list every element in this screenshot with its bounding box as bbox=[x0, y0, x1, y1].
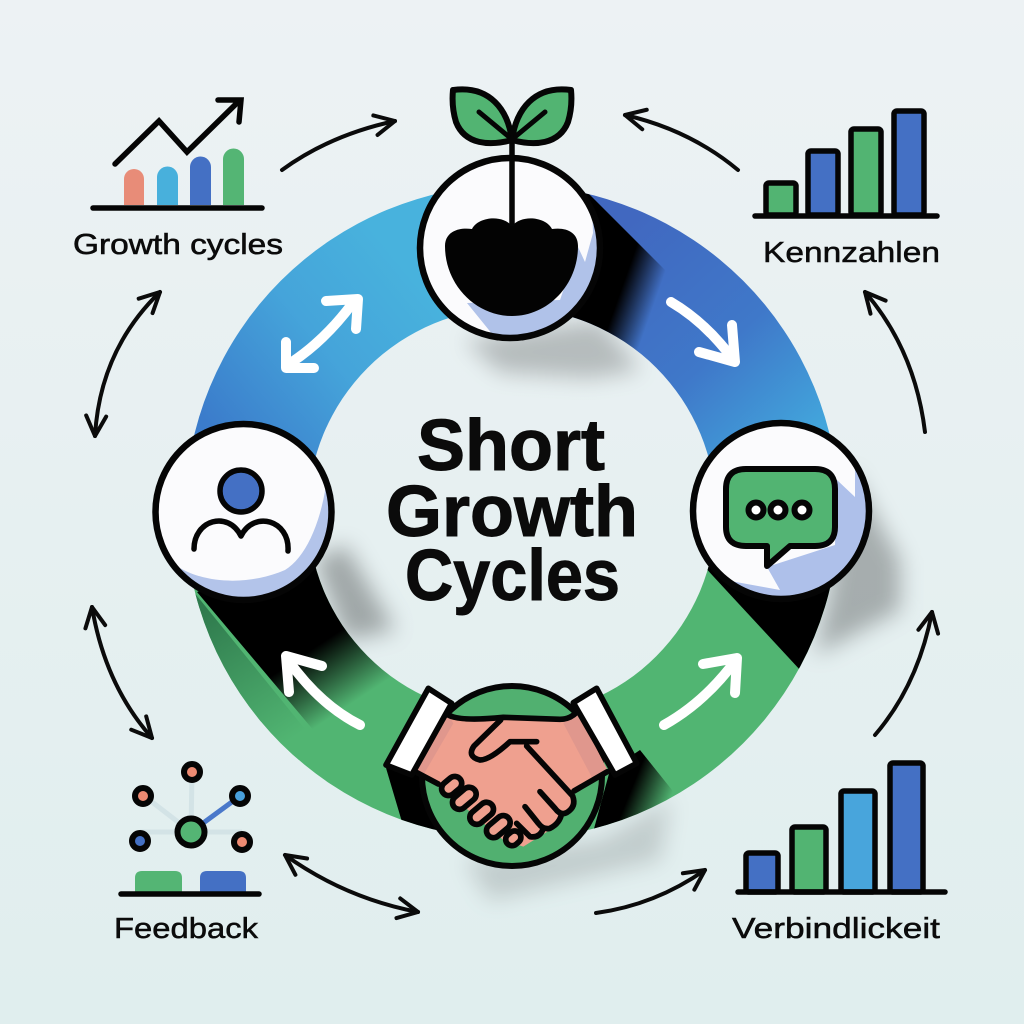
icon: growth chart bbox=[93, 100, 262, 208]
inner arrow: double top left bbox=[286, 299, 358, 368]
black shadow: handshake right bbox=[594, 750, 672, 828]
icon: person shoulders bbox=[194, 521, 288, 551]
title bbox=[386, 406, 638, 616]
label: kennzahlen: Kennzahlen bbox=[763, 237, 940, 269]
icon: person head bbox=[220, 470, 262, 512]
icon: soil bbox=[445, 218, 578, 316]
crescent shade bbox=[467, 222, 597, 335]
icon: cuffs bbox=[386, 688, 452, 775]
arrow: double left lower bbox=[92, 607, 152, 738]
title: Growth bbox=[386, 472, 638, 552]
inner arrow: bottom right bbox=[664, 658, 737, 725]
icon: bubble dots bbox=[748, 502, 810, 518]
icon: feedback network bbox=[121, 764, 259, 894]
black shadow: chat circle bbox=[708, 566, 830, 669]
node: seed circle bbox=[420, 89, 620, 345]
crescent shade bbox=[734, 470, 866, 596]
icon: speech bubble bbox=[726, 469, 835, 566]
icon: right hand fingers bbox=[517, 746, 574, 837]
icon: thumb bbox=[471, 720, 537, 760]
node: chat circle bbox=[693, 423, 880, 610]
node: person circle bbox=[152, 420, 335, 597]
icon: right leaf bbox=[512, 89, 571, 143]
title: Cycles bbox=[405, 536, 620, 616]
inner arrow: top right bbox=[671, 302, 735, 362]
icon: kennzahlen bars bbox=[755, 111, 937, 216]
title: Short bbox=[417, 406, 605, 486]
arrow: double bottom bbox=[285, 855, 418, 912]
icon: sprout stem bbox=[509, 135, 515, 226]
inner arrow: bottom left bbox=[286, 656, 360, 725]
cycle ring bbox=[194, 193, 830, 830]
icon: hands bbox=[415, 712, 608, 847]
outer cycle arrows bbox=[92, 115, 932, 913]
arrow: up to kennzahlen bbox=[865, 292, 925, 432]
black shadow: handshake left bbox=[386, 768, 436, 830]
icon: left leaf bbox=[453, 89, 512, 143]
label: feedback: Feedback bbox=[114, 913, 259, 945]
icon: verbindlichkeit bars bbox=[738, 763, 945, 892]
black shadow: person circle bbox=[197, 568, 389, 726]
arrow: up to chat bbox=[875, 612, 932, 735]
crescent shade bbox=[180, 489, 328, 597]
icon: left hand fingers bbox=[439, 774, 465, 798]
ring segment: top right blue bbox=[572, 194, 830, 456]
soft shadows bbox=[315, 320, 900, 900]
label: growth cycles: Growth cycles bbox=[73, 229, 283, 261]
label: verbindlickeit: Verbindlickeit bbox=[732, 913, 940, 945]
ring segment: bottom green bbox=[194, 566, 830, 830]
ring segment: top left blue bbox=[194, 194, 448, 456]
black shadow: seed circle bbox=[572, 193, 664, 350]
arrow: to verbindlickeit bbox=[596, 870, 705, 913]
arrow: double left upper bbox=[95, 292, 160, 436]
shade on lower left green bbox=[195, 594, 299, 760]
arrow: kennzahlen to seed bbox=[625, 115, 738, 170]
arrow: growth to seed bbox=[282, 121, 395, 170]
node: handshake bbox=[386, 686, 637, 866]
